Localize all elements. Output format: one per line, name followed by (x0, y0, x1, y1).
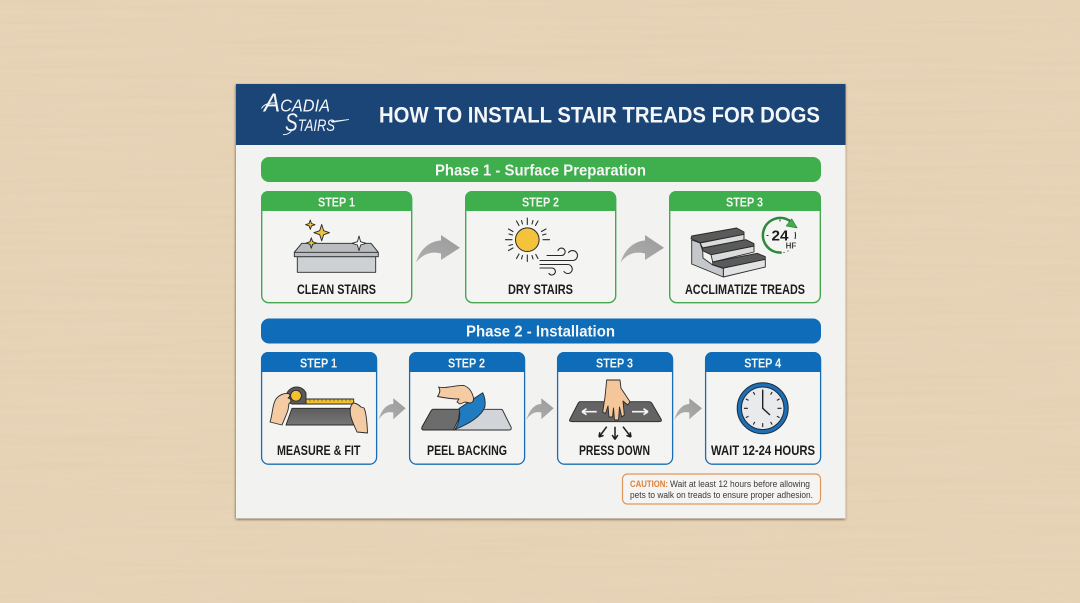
phase 2 step 2: peel backing (409, 352, 525, 464)
icon: stairs (691, 228, 765, 277)
arrow (416, 235, 460, 262)
phase 1 step 2: dry stairs: DRY STAIRS (508, 281, 573, 297)
phase 1 step 1: clean stairs: STEP 1 (318, 194, 355, 210)
icon: hand peeling backing (422, 385, 511, 430)
phase 1 step 2: dry stairs (465, 191, 616, 303)
header band (236, 84, 846, 145)
phase 2 step 2: peel backing: STEP 2 (448, 355, 485, 370)
caution callout: Wait at least 12 hours before allowing (670, 479, 810, 490)
phase 2 step 3: press down: STEP 3 (596, 355, 633, 370)
icon: wall clock (737, 383, 788, 434)
icon: 24 hour clock: HF (786, 242, 796, 251)
phase 2 step 1: measure and fit (261, 352, 377, 464)
phase 1 heading (261, 157, 821, 182)
phase 2 heading: Phase 2 - Installation (466, 324, 615, 341)
phase 2 step 3: press down (557, 352, 673, 464)
icon: hand pressing mat (570, 380, 661, 440)
phase 2 step 1: measure and fit: MEASURE & FIT (277, 442, 361, 458)
arrow (620, 235, 664, 262)
icon: tape measure and hands (270, 387, 368, 433)
phase 1 step 3: acclimatize treads: ACCLIMATIZE TREADS (685, 281, 805, 297)
logo: Acadia Stairs: ACADIA (262, 88, 330, 118)
phase 1 heading: Phase 1 - Surface Preparation (435, 162, 646, 180)
icon: 24 hour clock (763, 218, 797, 253)
phase 2 step 4: wait 12-24 hours: WAIT 12-24 HOURS (711, 442, 815, 458)
icon: 24 hour clock: 24 (772, 227, 789, 244)
arrow (674, 398, 702, 420)
icon: sun and wind (506, 218, 577, 275)
phase 2 step 3: press down: PRESS DOWN (579, 442, 650, 458)
caution callout (622, 474, 820, 504)
phase 2 step 4: wait 12-24 hours (705, 352, 821, 464)
phase 1 step 1: clean stairs (261, 191, 412, 303)
logo: Acadia Stairs: STAIRS (285, 109, 335, 137)
phase 1 step 3: acclimatize treads (669, 191, 821, 303)
phase 1 step 3: acclimatize treads: STEP 3 (726, 194, 763, 210)
phase 1 step 2: dry stairs: STEP 2 (522, 194, 559, 210)
logo: Acadia Stairs (262, 88, 349, 137)
phase 1 step 1: clean stairs: CLEAN STAIRS (297, 281, 376, 297)
caution callout: pets to walk on treads to ensure proper adhesion. (630, 490, 813, 501)
phase 2 step 4: wait 12-24 hours: STEP 4 (744, 355, 782, 370)
phase 2 step 2: peel backing: PEEL BACKING (427, 442, 507, 458)
caution callout: CAUTION: (630, 479, 668, 490)
arrow (526, 398, 554, 420)
title: HOW TO INSTALL STAIR TREADS FOR DOGS (379, 103, 820, 128)
icon: clean stair with sparkles (294, 220, 378, 272)
phase 2 heading (261, 318, 821, 344)
poster (236, 84, 846, 518)
phase 2 step 1: measure and fit: STEP 1 (300, 355, 337, 370)
arrow (378, 398, 406, 420)
